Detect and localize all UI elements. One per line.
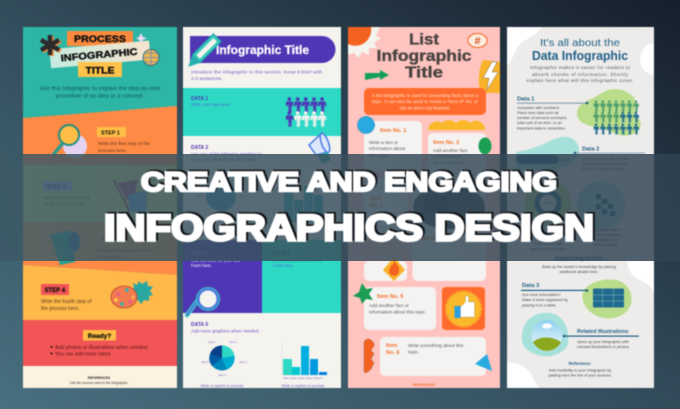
item 2 [428,133,486,180]
data 3: placing it on a table. [522,302,557,308]
supporting details [542,256,616,274]
captions: different categories [588,232,622,237]
data 4 block: DATA 4 [273,251,290,257]
panel: list infographic [348,27,500,388]
chart: pie: Write a caption to provide [201,384,243,388]
data 1: important data to remember. [517,126,566,130]
intro text: Infographic makes it easier for readers to [530,65,630,70]
data 3 [521,283,588,308]
item 6: Item [386,343,397,349]
data 1: number of persons surveyed, [517,115,567,120]
step 4: the process here. [41,306,80,312]
data 1: total cost of an item, or an [517,120,562,125]
panel: process infographic [23,27,177,388]
icon: hash badge: # [474,36,481,48]
title: process infographic title: PROCESS [74,34,126,45]
item 2: or information [433,154,462,159]
item 5 [364,287,436,330]
chart: bars: Item 1 Item 2 Item 3 Item 4 Item 5 [284,376,323,380]
supporting details: Supporting Details [555,256,603,262]
item 5: Item No. 5 [377,294,403,300]
intro box: A list infographic is used for presenting facts about a [372,93,479,98]
item 6: No. 6 [386,350,399,356]
data 3 block: Use this area for your text [191,258,241,263]
references: REFERENCES [88,376,111,380]
icon: green arrow [365,70,389,80]
icon: megaphone [309,132,332,164]
chart: pie: Item 1 [208,340,216,344]
intro text [191,70,322,82]
headline line 2: INFOGRAPHICS DESIGN [106,206,596,247]
data 5 heading: Add more graphics when needed. [191,328,260,334]
data 3 block: Form here. [191,263,212,268]
intro text: 2-3 sentences. [191,76,222,82]
data 4 block: Form here. [273,263,294,268]
title: List [409,32,439,48]
item 3: No. 3 [370,203,383,209]
data 1: Place here data such as [517,110,559,115]
panel: infographic title with data [183,27,341,388]
pictogram: people [286,97,327,127]
icon: hash badge [468,34,487,48]
intro text: explain here what will this infographic cover. [526,78,634,83]
data 3 block: DATA 3 [191,251,208,257]
icon: green table blob [582,279,632,318]
chart: donut [525,180,571,226]
data 3: Got more information? [522,292,562,297]
icon: sun [348,27,381,58]
captions: to highlight the [592,237,618,242]
intro box: cite an item's top features. [399,106,451,110]
references: Cite the sources used in the infographic. [70,381,128,385]
item 2: Add another fact [433,148,468,153]
icon: paint palette [111,281,153,308]
item 4 photo: Item No. 4 [418,236,445,242]
icon: lightning [479,60,500,93]
icon: yellow scallop [428,120,485,130]
supporting details: additional details here. [560,269,598,274]
related illustrations [563,329,639,349]
item 1: Write a fact or [369,140,399,145]
intro box: topic. It can also be used to create a "best of" list, or [372,99,479,104]
icon: globe [143,50,159,66]
item 6: Write something about this [408,343,464,348]
step 1: Write the first step of the [98,141,150,147]
title [376,32,472,82]
data 2: figures at a glance here. [582,166,624,171]
headline line 1: CREATIVE AND ENGAGING [141,167,557,197]
item 1: information about [369,146,406,151]
item 6: topic. [408,350,419,354]
item 3: Item [370,196,381,202]
chart: pie: Item 3 [239,360,247,364]
callout: ready: You can add more steps [55,352,111,358]
data 3 block [183,240,262,313]
icon: landscape illustration [522,313,568,356]
related illustrations: Spice up your infographic with [577,339,629,344]
captions: visual emphasis here [530,246,566,251]
panel: data infographic [507,27,654,388]
callout: ready: Add photos or illustrations when needed [55,345,147,351]
step 4: STEP 4 [44,288,66,294]
step 2: Write the second step [44,195,91,201]
data 1 [517,96,588,130]
title pill [190,36,335,63]
item 3 [364,178,408,238]
title [532,38,628,63]
chart: block grid [577,181,625,229]
headline line 1: CREATIVE AND ENGAGING [143,166,559,196]
data 4 block [262,240,341,313]
item 1 [364,121,422,171]
icon: magnifier [53,125,87,158]
item 6 [380,337,486,376]
title: It's all about the [540,38,620,49]
chart: pie [201,340,247,388]
chart: bars [282,342,328,388]
step 2: of the process here. [44,201,86,207]
icon: pencil [184,34,221,71]
step 3: STEP 3 [102,237,121,243]
title: process infographic title: TITLE [86,66,114,76]
icon: thumbs up [442,287,485,330]
data 2 text: DATA 2 [191,145,208,151]
callout: ready [50,330,147,358]
intro text [526,65,634,83]
data 1: Jumpstart with numbers! [517,105,559,110]
intro text: Introduce the infographic in this section. Keep it brief with [191,70,322,76]
data 5 heading [191,322,260,334]
captions: Show a data with [533,241,563,246]
captions [530,227,623,251]
icon: flag [114,180,147,212]
data 4 block: Use this area for your text [273,258,323,263]
progress bar: 90% [561,158,570,162]
icon: blue badge [358,116,374,134]
captions: important data [593,242,618,247]
step 1 [97,127,150,154]
step 1: STEP 1 [101,130,120,136]
item 4 photo [412,185,486,261]
callout: ready: Ready? [88,333,111,340]
item 5: Add another fact or [369,303,409,308]
item 1: Item No. 1 [380,128,406,134]
references: REFERENCES [413,383,436,387]
data 3: Make it more organized by [522,297,568,302]
data 1 band: DATA 1 [191,96,208,102]
references [70,376,128,385]
reference: Add credibility to your infographic by [549,368,611,372]
step 4: Write the fourth step of [41,299,92,305]
title: Data Infographic [532,49,628,63]
headline line 2: INFOGRAPHICS DESIGN [104,208,594,248]
item 2: Item No. 2 [433,140,459,146]
icon: orange squiggle [364,339,374,373]
icon: green star [353,283,373,304]
chart: bars: Write a caption to provide [282,384,324,388]
title: process infographic title: INFOGRAPHIC [60,47,138,64]
chart: small bars [284,186,323,222]
data 2: percentages and compare [582,161,627,166]
title: Title [405,64,443,82]
intro text: Use this infographic to explain the step-by-step [40,86,160,92]
icon: asterisk [41,35,60,56]
item 1: this topic. [369,153,389,158]
title: process infographic title [49,31,151,77]
icon: blue triangle [475,354,492,371]
intro text [40,86,160,100]
icon: green blob [577,89,641,136]
item 5: information about this topic. [369,310,426,314]
data 2 [574,146,645,171]
icon: flame badge [383,257,405,281]
data 2 text: show your data or visualize facts. [191,157,257,162]
overlay band [0,154,680,261]
chart: donut: 75% [543,201,553,206]
supporting details: Build up the reader's knowledge by placing [542,264,616,269]
intro text: procedure of an idea or a concept. [56,94,144,100]
reference: pasting here the link of your sources. [548,372,612,378]
step 1: process here. [98,148,127,154]
item 2: about this topic. [433,160,466,165]
step 2 [43,181,91,207]
step 3: Write the third step of the [98,248,152,254]
data 1 band: Write your data here. [191,102,231,107]
data 2 text [191,145,263,162]
data 3: Data 3 [522,283,540,289]
data 2: Use a progress bar to show [582,156,630,161]
related illustrations: Related Illustrations [577,329,629,335]
data 5 heading: DATA 5 [191,322,208,328]
intro box [364,88,486,115]
icon: magnifier [187,288,220,315]
icon: green oval [478,138,492,154]
step 2: STEP 2 [47,184,66,190]
step 4 [41,284,92,312]
chart: small pie: Item [240,193,248,198]
icon: megaphone [50,230,80,265]
item 3 continuation [364,258,486,281]
data 2 text: Use any of the following graphics to [191,152,263,156]
chart: pie: Item 5 [201,360,209,364]
icon: sparkle [136,33,147,42]
reference: Reference: [569,361,592,366]
data 1: Data 1 [517,96,535,102]
chart: pie: Item 2 [229,340,237,344]
title pill: Infographic Title [216,45,309,57]
intro text: absorb chunks of information. Shortly [532,72,629,77]
data 1 band [183,88,341,136]
chart: pie: Item 4 [218,373,226,377]
captions: Use graphics with a [588,227,623,232]
chart: small pie [195,181,248,211]
icon: teal blob [516,137,579,170]
title: Infographic [376,48,472,65]
pictogram: people [594,100,639,134]
chart: small pie: Item [195,193,203,198]
step 3 [98,237,152,261]
step 3: process here. [98,255,127,261]
data 2: Data 2 [582,146,599,152]
related illustrations: relevant illustrations or photos. [577,344,630,349]
reference [548,361,612,378]
progress bar [516,155,570,164]
